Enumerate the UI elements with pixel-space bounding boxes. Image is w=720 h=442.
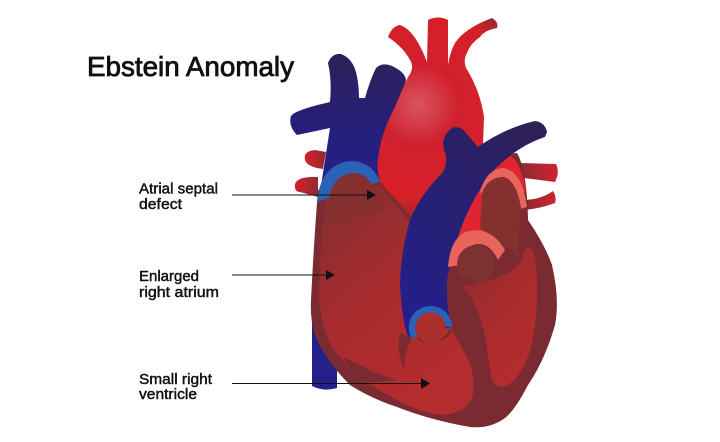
pulmonary artery [400, 121, 547, 337]
inferior vena cava [312, 310, 337, 390]
lower blue valve arc [412, 309, 449, 337]
left ventricle chamber [462, 247, 537, 387]
label: atrial septal defect: Atrial septal [139, 182, 218, 198]
label: enlarged right atrium [139, 269, 219, 301]
arrow: small right ventricle [232, 378, 430, 389]
arrow: atrial septal defect [232, 190, 376, 200]
lower salmon valve arc [448, 230, 505, 267]
label: small right ventricle: Small right [139, 372, 212, 388]
mitral valve leaflets [457, 257, 517, 283]
wall fold [343, 357, 395, 382]
upper blue valve arc [317, 161, 380, 202]
label: small right ventricle [139, 372, 212, 403]
arrow: enlarged right atrium [232, 270, 335, 280]
septal fold [399, 333, 412, 371]
heart illustration [290, 18, 558, 427]
label: atrial septal defect [139, 182, 218, 213]
left pulmonary veins [295, 150, 326, 197]
atrial septal defect opening [329, 173, 384, 225]
left atrial appendage [480, 177, 521, 258]
aorta [377, 18, 497, 220]
tricuspid valve circle [414, 310, 446, 342]
right pulmonary veins [520, 163, 558, 210]
tricuspid valve leaflets [417, 328, 452, 344]
mitral valve circle [457, 245, 495, 283]
left atrium red area [450, 155, 526, 240]
heart body [311, 153, 557, 427]
title: Ebstein Anomaly [87, 51, 294, 82]
label: small right ventricle: ventricle [139, 387, 197, 403]
label: enlarged right atrium: right atrium [139, 285, 219, 301]
right atrium and right ventricle chamber [319, 185, 474, 415]
upper salmon valve arc [480, 168, 527, 209]
label: atrial septal defect: defect [139, 197, 182, 213]
superior vena cava [290, 54, 406, 205]
label: enlarged right atrium: Enlarged [139, 269, 199, 285]
